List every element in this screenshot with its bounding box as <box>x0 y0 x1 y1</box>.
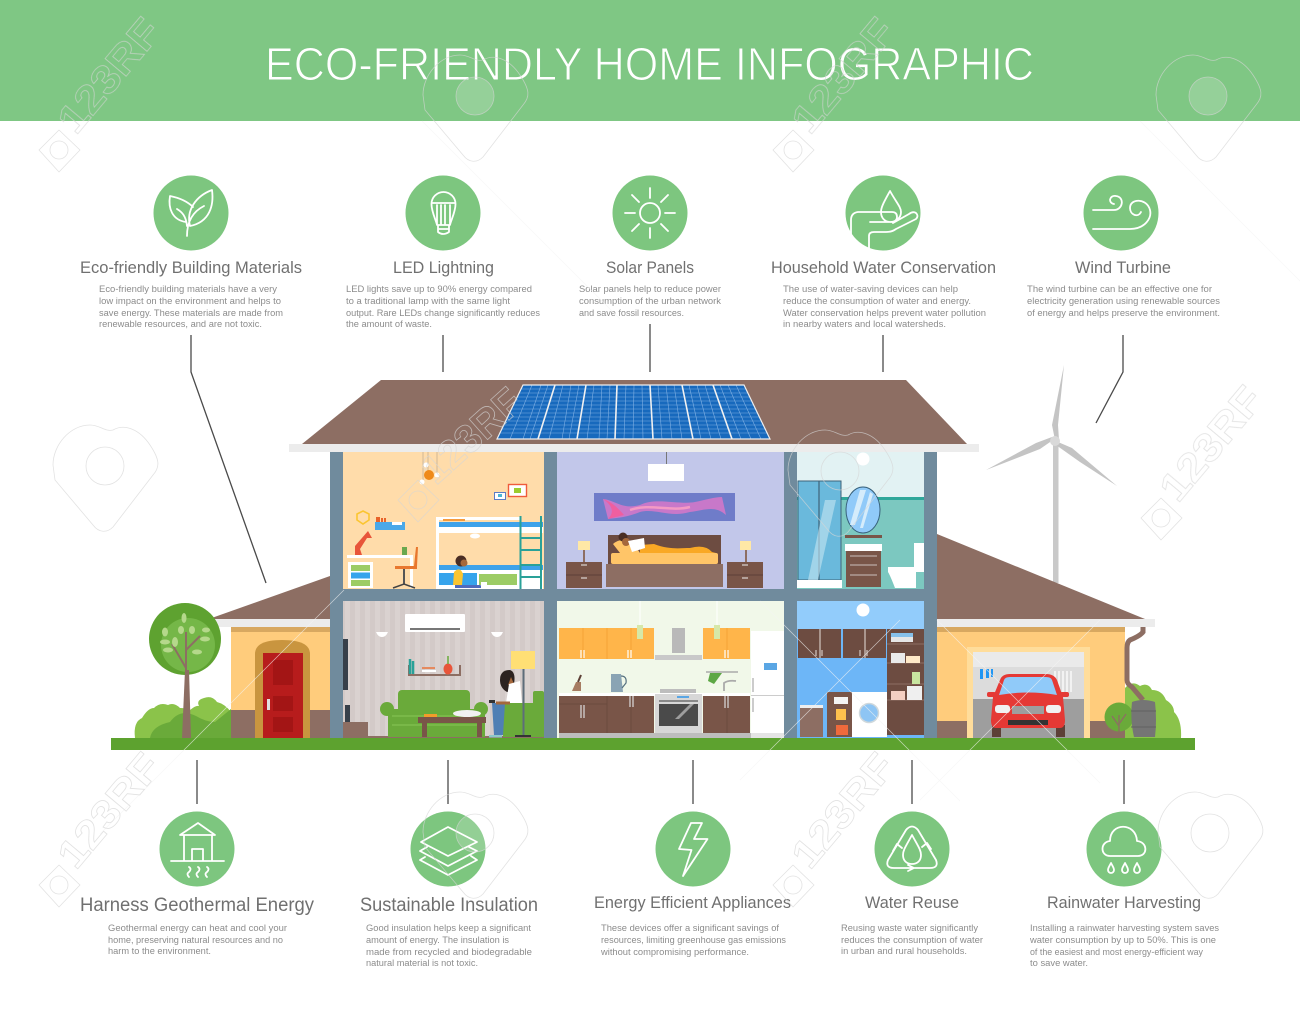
panel: rainwater harvesting <box>1029 760 1220 968</box>
description <box>600 923 787 957</box>
leader line <box>442 335 444 372</box>
panel: LED lightning <box>346 176 541 372</box>
description: renewable resources, and are not toxic. <box>99 319 262 329</box>
panel: geothermal energy <box>80 760 314 956</box>
description <box>99 284 283 329</box>
description <box>579 284 722 318</box>
watermarks: 123RF <box>413 380 531 493</box>
leader line <box>692 760 694 804</box>
icon: rain cloud <box>1086 812 1162 886</box>
description: and save fossil resources. <box>579 308 684 318</box>
right wing: eave <box>937 619 1155 627</box>
description: without compromising performance. <box>600 947 749 957</box>
description: output. Rare LEDs change significantly reduces <box>346 308 541 318</box>
description: These devices offer a significant savings of <box>601 923 780 933</box>
description: in urban and rural households. <box>841 946 967 956</box>
car <box>987 674 1069 737</box>
house: structural walls <box>330 452 937 738</box>
house: main roof <box>302 380 967 444</box>
panel: energy efficient appliances <box>594 760 791 957</box>
panel: eco-friendly building materials <box>80 176 302 583</box>
tree <box>149 603 221 738</box>
description: Reusing waste water significantly <box>841 923 979 933</box>
watermarks: 123RF <box>783 10 904 142</box>
solar panel array <box>497 385 770 439</box>
description: the amount of waste. <box>346 319 432 329</box>
description: harm to the environment. <box>108 946 211 956</box>
description: Installing a rainwater harvesting system saves <box>1030 923 1220 933</box>
icon: light bulb <box>406 176 480 250</box>
description: amount of energy. The insulation is <box>366 935 510 945</box>
icon: sun <box>612 176 688 250</box>
title: ECO-FRIENDLY HOME INFOGRAPHIC <box>265 38 1034 90</box>
description: of the easiest and most energy-efficient way <box>1030 947 1203 957</box>
heading: Water Reuse <box>865 893 959 912</box>
description <box>108 923 287 956</box>
house: eave <box>289 444 979 452</box>
description <box>1029 923 1220 968</box>
watermarks: 123RF <box>783 745 904 877</box>
description <box>346 284 541 329</box>
description: Water conservation helps prevent water pollution <box>783 308 986 318</box>
wind turbine illustration <box>986 365 1117 583</box>
right wing: roof <box>937 534 1145 619</box>
description: to save water. <box>1030 958 1088 968</box>
panel: household water conservation <box>771 176 996 372</box>
description: LED lights save up to 90% energy compared <box>346 284 532 294</box>
icon: leaves <box>154 176 228 250</box>
room: laundry <box>797 601 924 738</box>
watermarks: 123RF <box>1151 378 1272 510</box>
heading: Eco-friendly Building Materials <box>80 258 302 277</box>
right wing: wall and garage <box>937 627 1125 738</box>
description <box>783 284 986 329</box>
description <box>1027 284 1221 318</box>
leader line <box>1096 335 1123 423</box>
icon: wind <box>1084 176 1158 250</box>
left bushes <box>135 697 231 738</box>
description: Geothermal energy can heat and cool your <box>108 923 287 933</box>
heading: Household Water Conservation <box>771 258 996 277</box>
description: to a traditional lamp with the same light <box>346 296 511 306</box>
room: living room <box>343 601 544 738</box>
leader line <box>911 760 913 804</box>
description: reduces the consumption of water <box>841 935 983 945</box>
heading: Sustainable Insulation <box>360 895 538 916</box>
description: The wind turbine can be an effective one for <box>1027 284 1212 294</box>
description: reduce the consumption of water and energy. <box>783 296 971 306</box>
panel: wind turbine <box>1027 176 1221 423</box>
description: low impact on the environment and helps to <box>99 296 281 306</box>
room: kids bedroom <box>343 452 544 589</box>
icon: lightning bolt <box>656 812 730 886</box>
leader line <box>649 324 651 372</box>
ground strip <box>111 738 1195 750</box>
description: consumption of the urban network <box>579 296 722 306</box>
description: Good insulation helps keep a significant <box>366 923 532 933</box>
panel: solar panels <box>579 176 722 372</box>
icon: water recycling <box>874 812 950 886</box>
heading: Wind Turbine <box>1075 258 1171 277</box>
heading: Solar Panels <box>606 258 694 277</box>
leader line <box>1123 760 1125 804</box>
room: bathroom <box>797 452 924 589</box>
watermarks: 123RF <box>49 745 170 877</box>
rain barrel, pipe and shrubs <box>1104 627 1181 738</box>
icon: insulation layers <box>410 812 486 886</box>
description: home, preserving natural resources and no <box>108 935 283 945</box>
leader line <box>447 760 449 804</box>
description: natural material is not toxic. <box>366 958 478 968</box>
header banner <box>0 0 1300 121</box>
panel: water reuse <box>841 760 983 956</box>
icon: hand and water drop <box>846 176 920 250</box>
description: resources, limiting greenhouse gas emissions <box>601 935 787 945</box>
heading: Harness Geothermal Energy <box>80 895 314 916</box>
description <box>841 923 983 956</box>
description: made from recycled and biodegradable <box>366 947 532 957</box>
leader line <box>196 760 198 804</box>
heading: Rainwater Harvesting <box>1047 893 1201 912</box>
description: in nearby waters and local watersheds. <box>783 319 946 329</box>
panel: sustainable insulation <box>360 760 538 968</box>
icon: house and ground heat <box>160 812 234 886</box>
description: of energy and helps preserve the environment. <box>1027 308 1220 318</box>
leader line <box>882 335 884 372</box>
left wing: roof <box>206 576 330 620</box>
description: The use of water-saving devices can help <box>783 284 958 294</box>
description: Eco-friendly building materials have a very <box>99 284 278 294</box>
description: save energy. These materials are made from <box>99 308 283 318</box>
heading: Energy Efficient Appliances <box>594 893 791 912</box>
description: water consumption by up to 50%. This is one <box>1029 935 1216 945</box>
description <box>366 923 532 968</box>
left wing: wall with door <box>231 627 330 738</box>
room: kitchen <box>557 601 784 738</box>
description: electricity generation using renewable sources <box>1027 296 1221 306</box>
heading: LED Lightning <box>393 258 494 277</box>
watermarks: 123RF <box>49 10 170 142</box>
description: Solar panels help to reduce power <box>579 284 721 294</box>
room: master bedroom <box>557 452 784 589</box>
left wing: eave <box>200 619 330 627</box>
leader line <box>191 335 266 583</box>
